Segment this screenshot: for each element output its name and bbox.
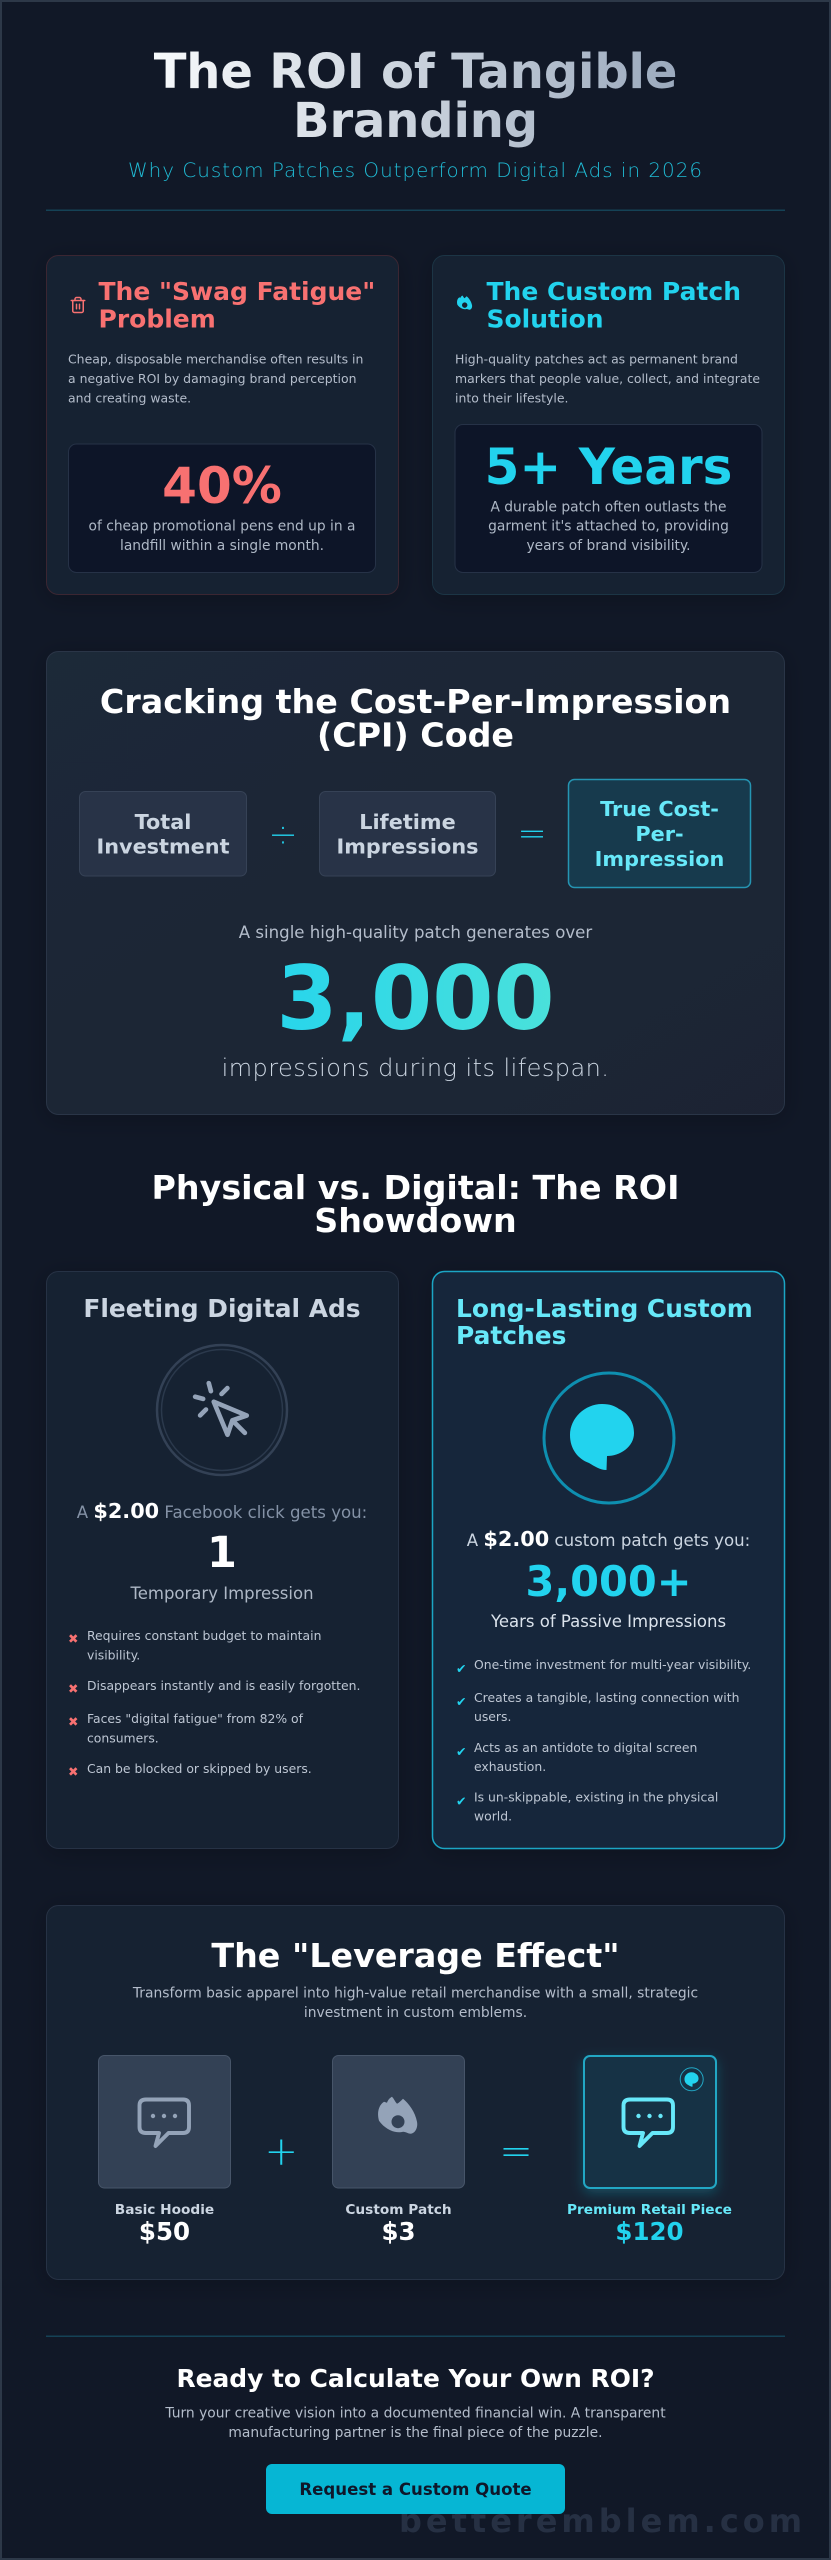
heading: cracking the CPI code: (CPI) Code [317, 716, 514, 754]
stat box: 40% [68, 444, 376, 572]
list: patch benefits: users. [474, 1709, 511, 1724]
stat box: 40%: of cheap promotional pens end up in a [89, 518, 355, 534]
header [128, 44, 703, 182]
icon: trash can [71, 298, 85, 312]
item: custom patch [332, 2056, 464, 2246]
list: patch benefits [456, 1657, 751, 1824]
text: patch cost: A $2.00 custom patch gets you: [467, 1527, 750, 1551]
icon: patch flame [378, 2097, 417, 2134]
item: basic hoodie: $50 [139, 2217, 190, 2246]
formula box: true cost per impression: True Cost- [600, 797, 719, 821]
subtitle: Why Custom Patches Outperform Digital Ads in 2026 [128, 159, 703, 182]
stat box: 40%: landfill within a single month. [120, 538, 324, 554]
button: request a custom quote [266, 2464, 565, 2514]
list: patch benefits: Is un-skippable, existing in the physical [474, 1790, 718, 1804]
heading: cracking the CPI code [100, 682, 731, 754]
formula box: lifetime impressions [320, 792, 496, 876]
text: impressions during lifespan: impressions during its lifespan. [222, 1054, 609, 1082]
stat box: 5+ years: A durable patch often outlasts the [490, 500, 727, 516]
list: patch benefits: world. [474, 1808, 512, 1824]
list: patch benefits: Acts as an antidote to digital screen [474, 1740, 697, 1755]
watermark: betteremblem.com [399, 2502, 806, 2540]
text: solution description [455, 352, 760, 406]
text: leverage description [132, 1986, 698, 2021]
text: problem description: a negative ROI by damaging brand perception [68, 371, 356, 386]
list: digital ad drawbacks: visibility. [87, 1648, 140, 1662]
title: Branding [293, 93, 538, 149]
button: request a custom quote: Request a Custom Quote [299, 2480, 532, 2499]
operator: equals: = [499, 2128, 533, 2174]
text: problem description: Cheap, disposable merchandise often results in [68, 352, 363, 366]
stat box: 5+ years: years of brand visibility. [526, 538, 691, 554]
list: digital ad drawbacks: Can be blocked or skipped by users. [87, 1761, 312, 1776]
icon: small patch badge [680, 2068, 703, 2091]
heading: custom patch solution [486, 277, 741, 334]
formula box: true cost per impression: Per- [635, 822, 684, 846]
footer call to action [164, 2364, 666, 2514]
panel: long-lasting custom patches [432, 1272, 784, 1848]
list: patch benefits: ✔ [456, 1694, 466, 1709]
stat box: 5+ years: 5+ Years [485, 438, 732, 496]
panel: fleeting digital ads [46, 1272, 398, 1848]
item: custom patch: $3 [381, 2217, 416, 2246]
item: custom patch: Custom Patch [345, 2202, 452, 2218]
operator: divide: ÷ [268, 815, 298, 855]
icon: premium speech bubble [624, 2100, 673, 2146]
heading: swag fatigue [98, 277, 375, 334]
big number: 3,000+: 3,000+ [525, 1557, 692, 1606]
text: generates over: A single high-quality patch generates over [239, 923, 592, 942]
formula box: total investment: Total [135, 810, 191, 834]
panel: custom patch solution [432, 256, 784, 594]
big number: 3,000: 3,000 [276, 947, 555, 1050]
formula box: true cost per impression [568, 780, 750, 888]
stat box: 5+ years [455, 424, 762, 572]
list: digital ad drawbacks [68, 1628, 360, 1779]
icon: patch flame [457, 296, 472, 310]
item: premium retail piece [567, 2056, 732, 2246]
list: digital ad drawbacks: Faces "digital fatigue" from 82% of [87, 1711, 304, 1726]
heading: physical vs digital [152, 1168, 679, 1240]
icon: hoodie speech bubble [140, 2100, 189, 2146]
heading: long-lasting custom patches [456, 1294, 753, 1350]
text: facebook click cost: A $2.00 Facebook click gets you: [77, 1499, 367, 1523]
item: premium retail piece: $120 [615, 2217, 684, 2246]
list: patch benefits: One-time investment for multi-year visibility. [474, 1657, 751, 1672]
formula box: lifetime impressions: Impressions [336, 834, 479, 858]
text: problem description: and creating waste. [68, 390, 191, 406]
text: temporary impression: Temporary Impression [129, 1584, 314, 1603]
formula box: lifetime impressions: Lifetime [359, 810, 456, 834]
heading: custom patch solution: The Custom Patch [486, 277, 741, 306]
list: patch benefits: ✔ [456, 1661, 466, 1676]
text: footer description [164, 2406, 666, 2441]
formula box: total investment [80, 792, 246, 876]
text: leverage description: Transform basic apparel into high-value retail merchandise with a small, strategic [132, 1986, 698, 2002]
formula box: true cost per impression: Impression [595, 847, 724, 871]
title: The ROI of Tangible [154, 44, 677, 100]
panel: cost per impression [46, 652, 784, 1114]
item: basic hoodie [98, 2056, 230, 2246]
text: solution description: into their lifestyle. [455, 390, 568, 406]
list: digital ad drawbacks: ✖ [68, 1714, 78, 1729]
text: solution description: markers that people value, collect, and integrate [455, 371, 760, 386]
list: patch benefits: ✔ [456, 1744, 466, 1759]
text: leverage description: investment in custom emblems. [304, 2005, 527, 2021]
heading: swag fatigue: Problem [98, 304, 216, 334]
list: digital ad drawbacks: Requires constant budget to maintain [87, 1628, 321, 1643]
big number: 1: 1 [207, 1528, 237, 1578]
stat box: 5+ years: garment it's attached to, providing [488, 518, 729, 534]
list: digital ad drawbacks: ✖ [68, 1764, 78, 1779]
text: years of passive impressions: Years of Passive Impressions [490, 1612, 726, 1631]
text: problem description [68, 352, 363, 406]
formula box: total investment: Investment [96, 834, 230, 858]
list: digital ad drawbacks: ✖ [68, 1681, 78, 1696]
list: patch benefits: Creates a tangible, lasting connection with [474, 1690, 739, 1705]
list: digital ad drawbacks: Disappears instantly and is easily forgotten. [87, 1678, 360, 1693]
item: premium retail piece: Premium Retail Piece [567, 2202, 732, 2218]
heading: long-lasting custom patches: Long-Lasting Custom [456, 1294, 753, 1323]
heading: cracking the CPI code: Cracking the Cost-Per-Impression [100, 682, 731, 721]
heading: physical vs digital: Physical vs. Digital: The ROI [152, 1168, 679, 1207]
heading: custom patch solution: Solution [486, 304, 604, 334]
icon: patch bubble [544, 1373, 674, 1503]
item: basic hoodie: Basic Hoodie [115, 2202, 214, 2218]
panel: leverage effect [46, 1906, 784, 2280]
text: solution description: High-quality patches act as permanent brand [455, 352, 738, 366]
heading: fleeting digital ads: Fleeting Digital Ads [83, 1294, 361, 1323]
operator: plus: + [265, 2129, 298, 2175]
heading: swag fatigue: The "Swag Fatigue" [98, 277, 375, 306]
title [154, 44, 677, 149]
heading: physical vs digital: Showdown [314, 1201, 517, 1240]
list: digital ad drawbacks: consumers. [87, 1730, 159, 1746]
heading: ready to calculate: Ready to Calculate Your Own ROI? [176, 2364, 655, 2393]
panel: swag fatigue problem [46, 256, 398, 594]
list: digital ad drawbacks: ✖ [68, 1631, 78, 1646]
text: footer description: manufacturing partner is the final piece of the puzzle. [228, 2425, 603, 2441]
stat box: 40%: 40% [162, 457, 282, 515]
list: patch benefits: ✔ [456, 1794, 466, 1808]
heading: long-lasting custom patches: Patches [456, 1321, 566, 1350]
icon: cursor click [157, 1345, 287, 1475]
text: footer description: Turn your creative vision into a documented financial win. A transparent [164, 2406, 666, 2422]
list: patch benefits: exhaustion. [474, 1759, 546, 1774]
heading: leverage effect: The "Leverage Effect" [211, 1936, 620, 1975]
operator: equals: = [517, 814, 547, 854]
